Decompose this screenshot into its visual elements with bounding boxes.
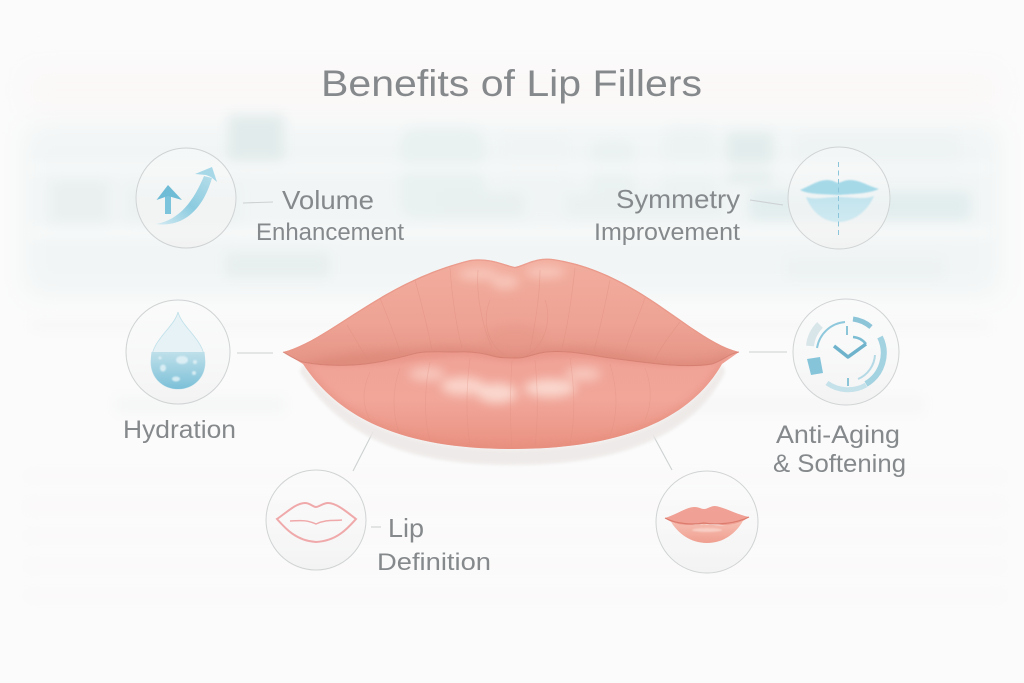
icon: small lips <box>665 506 749 543</box>
label <box>256 185 404 246</box>
label: Lip <box>388 513 424 543</box>
title: Benefits of Lip Fillers <box>321 63 702 104</box>
panel: volume enhancement <box>136 148 404 248</box>
label: Anti-Aging <box>776 421 900 449</box>
icon: clock <box>807 319 884 390</box>
label <box>594 184 740 246</box>
label <box>773 421 906 478</box>
lower lip <box>292 352 738 449</box>
panel: symmetry improvement <box>594 147 890 249</box>
label: Definition <box>377 549 491 576</box>
icon: symmetric lips <box>800 180 879 222</box>
infographic <box>37 69 988 574</box>
label: Symmetry <box>616 184 740 214</box>
icon: water drop <box>151 312 205 389</box>
icon: arrows up <box>156 167 217 224</box>
panel: anti-aging and softening <box>773 299 906 478</box>
label: & Softening <box>773 450 906 478</box>
central lips illustration <box>280 255 745 465</box>
icon: dashed axis <box>838 162 840 238</box>
panel: lip definition <box>266 470 491 576</box>
icon: lip outline <box>277 503 356 542</box>
mouth line <box>283 351 739 366</box>
label: Hydration <box>123 416 236 444</box>
upper lip <box>280 255 745 370</box>
panel: hydration <box>123 300 236 444</box>
connector lines <box>237 200 787 527</box>
label: Improvement <box>594 219 740 246</box>
panel: natural lips <box>656 471 758 573</box>
label <box>377 513 491 576</box>
label: Volume <box>282 185 374 215</box>
label: Enhancement <box>256 219 404 246</box>
